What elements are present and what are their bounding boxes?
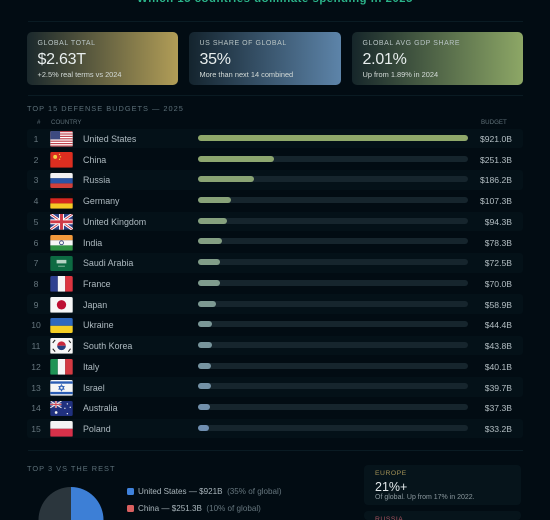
row: Japan: Japan xyxy=(83,300,107,310)
stat card: GDP share xyxy=(352,32,523,84)
row: Israel: Israel xyxy=(83,383,105,393)
pie chart xyxy=(38,487,104,520)
flag: China xyxy=(50,152,73,168)
row: Russia: 3 xyxy=(34,175,38,185)
panel: Europe: 21%+ xyxy=(375,480,407,494)
table header: BUDGET xyxy=(481,118,507,126)
row: Japan xyxy=(27,294,523,314)
row: Israel xyxy=(27,377,523,397)
row: Israel: 13 xyxy=(31,383,41,393)
stat card: GDP share: GLOBAL AVG GDP SHARE xyxy=(362,40,460,46)
flag: France xyxy=(50,276,73,292)
row: Poland xyxy=(27,419,523,438)
panel: Russia xyxy=(364,511,521,520)
flag: Germany xyxy=(50,193,73,209)
row: Australia: $37.3B xyxy=(485,403,512,413)
row: France xyxy=(34,276,512,292)
heading: top 3 vs the rest: TOP 3 VS THE REST xyxy=(27,464,115,472)
row: Italy: 12 xyxy=(31,362,41,372)
row: United States xyxy=(27,129,523,148)
stat card: US share xyxy=(189,32,341,84)
row: United States: 1 xyxy=(34,134,38,144)
row: Germany: $107.3B xyxy=(480,196,512,206)
flag: Italy xyxy=(50,359,73,375)
row: India xyxy=(34,235,512,251)
panel: Europe: EUROPE xyxy=(375,470,407,477)
row: India: India xyxy=(83,238,102,248)
table header: COUNTRY xyxy=(51,118,81,126)
row: United Kingdom: 5 xyxy=(34,217,38,227)
row: Japan: $58.9B xyxy=(485,300,512,310)
flag: Japan xyxy=(50,297,73,313)
row: China: 2 xyxy=(34,155,38,165)
flag: India xyxy=(50,235,73,251)
flag: Ukraine xyxy=(50,318,73,333)
row: South Korea: $43.8B xyxy=(485,341,512,351)
row: United Kingdom: United Kingdom xyxy=(83,217,146,227)
row: Japan: 9 xyxy=(34,300,38,310)
row: France: 8 xyxy=(34,279,38,289)
row: Israel: $39.7B xyxy=(485,383,512,393)
stat card: global total: $2.63T xyxy=(38,50,86,68)
row: Saudi Arabia: 7 xyxy=(34,258,38,268)
flag: Israel xyxy=(50,380,73,396)
row: South Korea: South Korea xyxy=(83,341,132,351)
panel: Europe: Of global. Up from 17% in 2022. xyxy=(375,494,475,501)
row: Saudi Arabia: $72.5B xyxy=(485,258,512,268)
stat card: GDP share: 2.01% xyxy=(362,50,407,68)
panel: Europe xyxy=(364,465,521,505)
flag: Russia xyxy=(50,173,73,188)
legend: United States: United States — $921B (35% of global) xyxy=(138,486,282,496)
stat card: US share: 35% xyxy=(200,50,231,68)
row: Ukraine xyxy=(31,318,512,333)
row: Ukraine: $44.4B xyxy=(485,320,512,330)
row: France: $70.0B xyxy=(485,279,512,289)
row: South Korea: 11 xyxy=(32,341,40,351)
row: United States: $921.0B xyxy=(480,134,512,144)
row: China xyxy=(34,152,512,168)
stat card: GDP share: Up from 1.89% in 2024 xyxy=(362,70,438,78)
row: United Kingdom xyxy=(27,212,523,231)
row: India: 6 xyxy=(34,238,38,248)
flag: Poland xyxy=(50,421,73,437)
row: Ukraine: Ukraine xyxy=(83,320,114,330)
row: South Korea xyxy=(27,336,523,355)
row: Italy xyxy=(31,359,512,375)
row: Saudi Arabia xyxy=(27,253,523,273)
row: Australia: Australia xyxy=(83,403,118,413)
row: Germany: 4 xyxy=(34,196,38,206)
row: Italy: Italy xyxy=(83,362,99,372)
row: Ukraine: 10 xyxy=(31,320,41,330)
row: Poland: $33.2B xyxy=(485,424,512,434)
row: France: France xyxy=(83,279,111,289)
stat card: global total: GLOBAL TOTAL xyxy=(38,40,96,46)
row: China: $251.3B xyxy=(480,155,512,165)
heading: top 15: TOP 15 DEFENSE BUDGETS — 2025 xyxy=(27,104,184,112)
row: United States: United States xyxy=(83,134,136,144)
stat card: US share: More than next 14 combined xyxy=(200,70,293,78)
row: China: China xyxy=(83,155,106,165)
table header xyxy=(37,118,507,126)
table header: # xyxy=(37,118,40,126)
row: United Kingdom: $94.3B xyxy=(485,217,512,227)
row: Germany: Germany xyxy=(83,196,120,206)
stat card: global total xyxy=(27,32,178,84)
flag: Saudi Arabia xyxy=(50,256,73,271)
row: Russia: $186.2B xyxy=(480,175,512,185)
row: Russia xyxy=(27,170,523,190)
legend: China: China — $251.3B (10% of global) xyxy=(138,504,261,513)
row: Italy: $40.1B xyxy=(485,362,512,372)
row: India: $78.3B xyxy=(485,238,512,248)
flag: US xyxy=(50,131,73,147)
row: Poland: Poland xyxy=(83,424,111,434)
row: Saudi Arabia: Saudi Arabia xyxy=(83,258,133,268)
stat card: global total: +2.5% real terms vs 2024 xyxy=(38,70,122,78)
row: Poland: 15 xyxy=(31,424,41,434)
stat card: US share: US SHARE OF GLOBAL xyxy=(200,40,287,46)
flag: Australia xyxy=(50,401,73,416)
row: Russia: Russia xyxy=(83,175,110,185)
row: Germany xyxy=(34,193,512,209)
row: Australia: 14 xyxy=(31,403,41,413)
row: Australia xyxy=(31,401,512,416)
flag: UK xyxy=(50,214,73,230)
flag: South Korea xyxy=(50,338,73,354)
